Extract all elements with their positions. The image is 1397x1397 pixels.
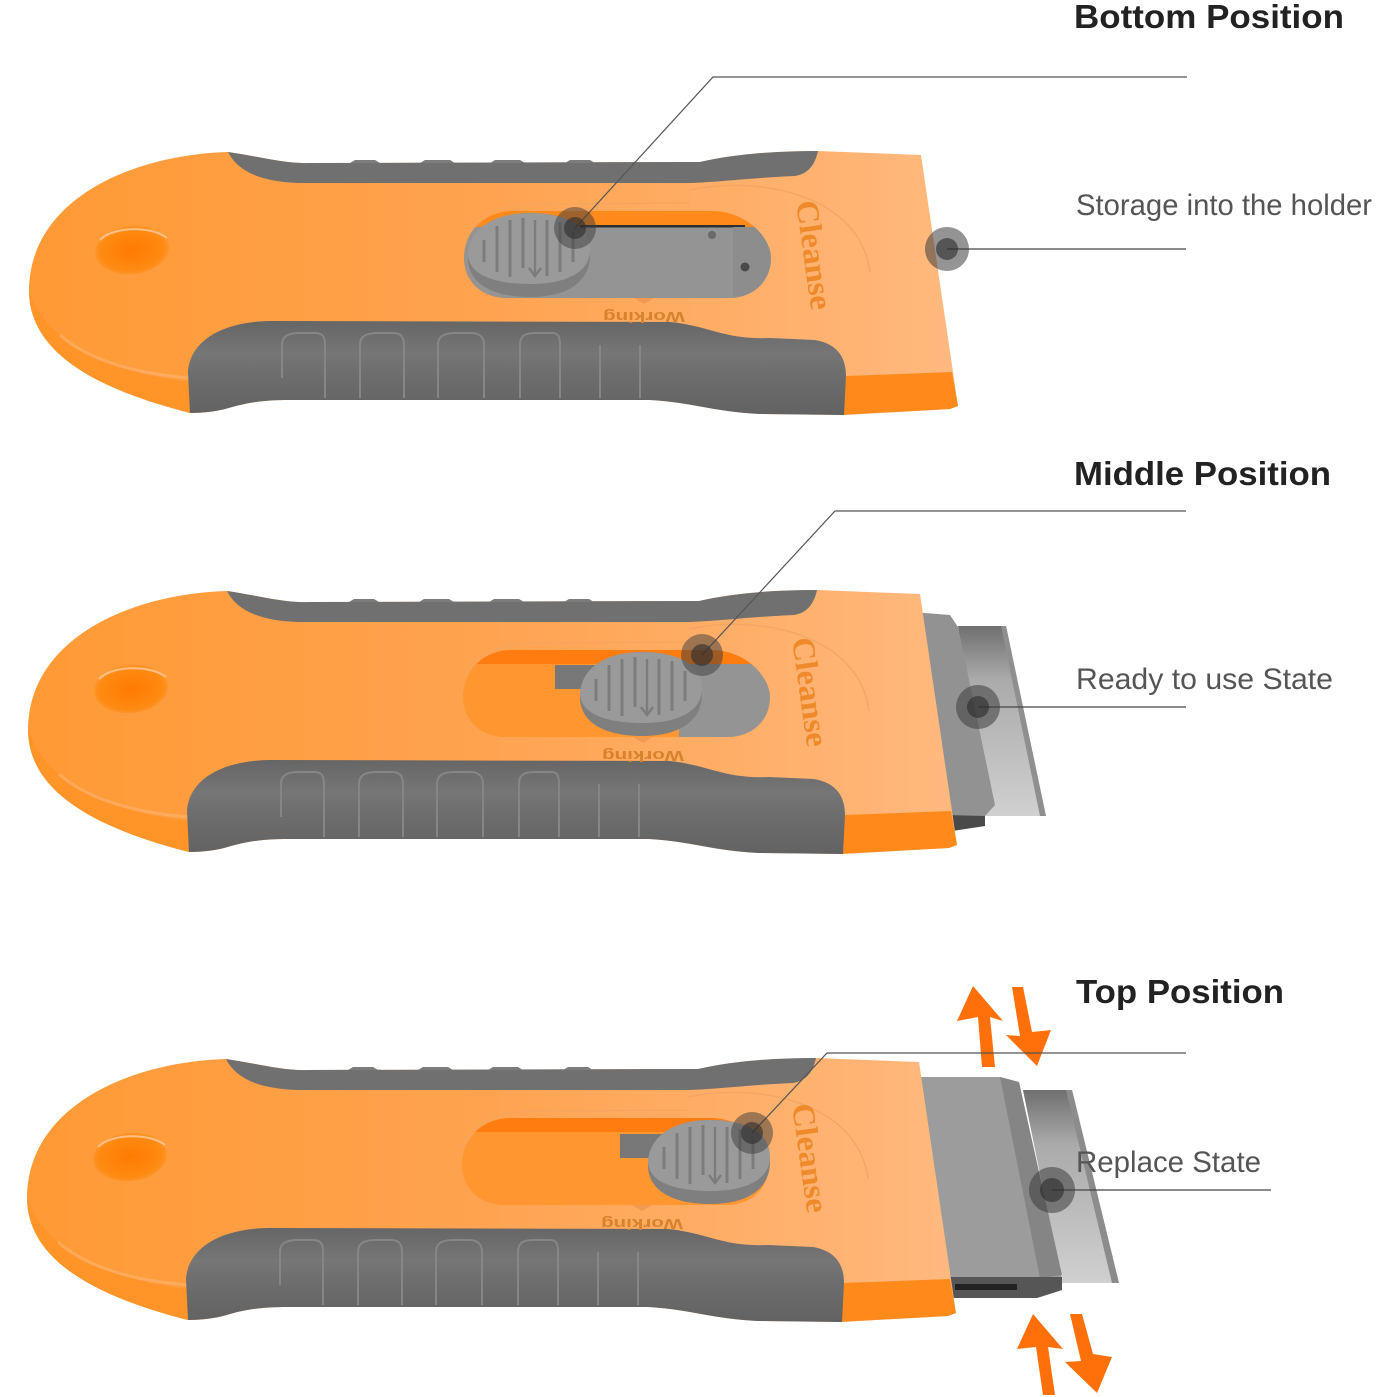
scraper: bottom position: Working bbox=[603, 308, 685, 325]
arrows below blade bbox=[1017, 1314, 1112, 1395]
scraper: top position bbox=[27, 1058, 1119, 1322]
scraper: bottom position bbox=[29, 151, 958, 415]
callout: replace state bbox=[1029, 1167, 1271, 1213]
callout: top position slider bbox=[731, 1053, 1186, 1154]
scraper: top position: Working bbox=[601, 1215, 683, 1232]
arrows above blade bbox=[957, 986, 1051, 1067]
callout: middle position slider bbox=[681, 511, 1186, 676]
scraper: middle position bbox=[28, 590, 1046, 854]
label: Storage into the holder: Storage into the holder bbox=[1076, 189, 1372, 222]
callout: storage bbox=[925, 227, 1186, 271]
scraper: middle position: Cleanse bbox=[785, 635, 836, 749]
extended blade bbox=[912, 612, 1046, 832]
label: Replace State: Replace State bbox=[1076, 1146, 1261, 1179]
scraper: middle position: Working bbox=[602, 747, 684, 764]
callout: bottom position slider bbox=[554, 77, 1187, 249]
heading: Middle Position: Middle Position bbox=[1074, 455, 1331, 492]
heading: Top Position: Top Position bbox=[1076, 973, 1284, 1010]
scraper: bottom position: Cleanse bbox=[789, 198, 840, 312]
label: Ready to use State: Ready to use State bbox=[1076, 663, 1333, 696]
extended blade and holder bbox=[912, 1077, 1119, 1298]
callout: ready to use bbox=[956, 685, 1186, 729]
scraper: top position: Cleanse bbox=[785, 1101, 836, 1215]
